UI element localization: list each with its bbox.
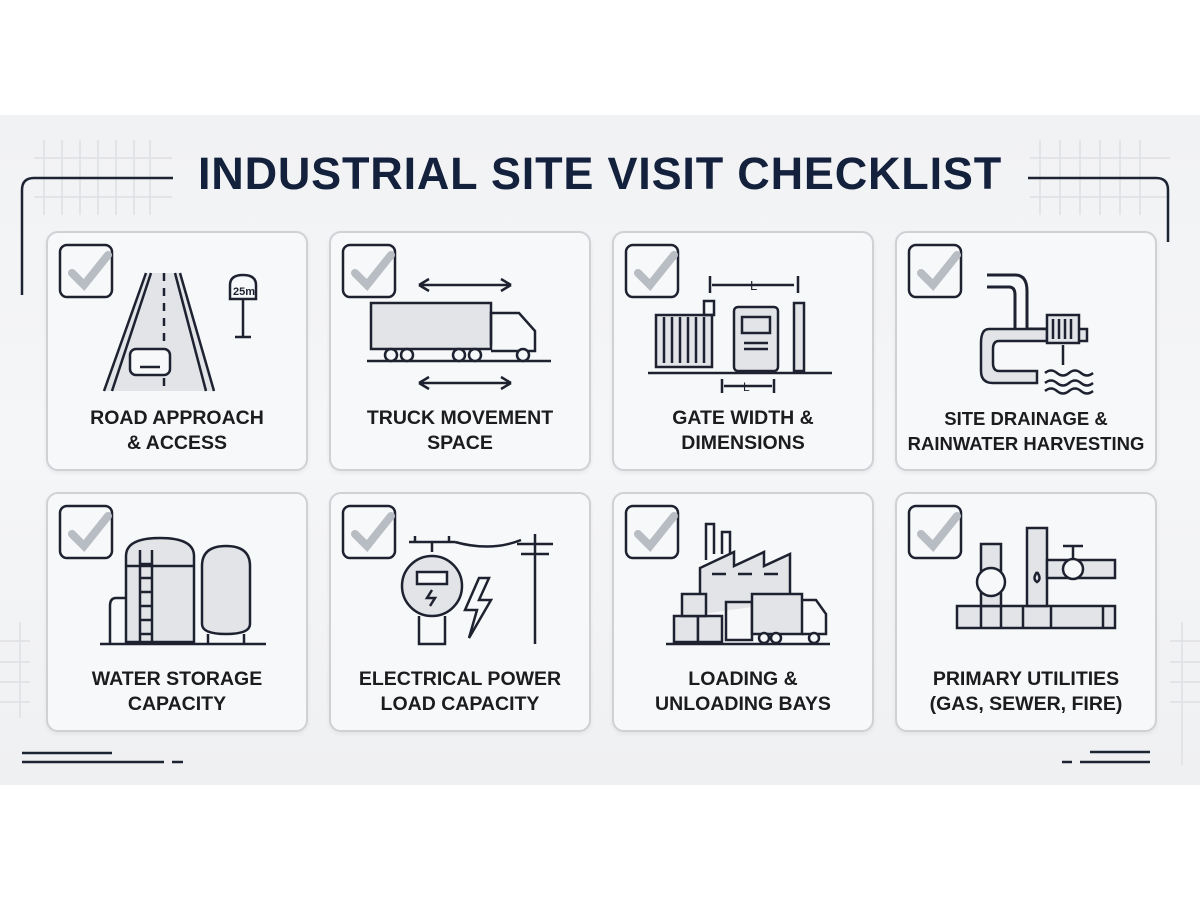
card: primary utilities: PRIMARY UTILITIES: [933, 668, 1119, 690]
icon: checkbox: [60, 506, 112, 558]
title: INDUSTRIAL SITE VISIT CHECKLIST: [198, 148, 1002, 199]
icon: pipes and water: [981, 275, 1093, 394]
card: road approach: [46, 231, 308, 471]
icon: road: 25m: [233, 286, 255, 298]
card: truck movement: TRUCK MOVEMENT: [367, 407, 553, 429]
icon: checkbox: [343, 506, 395, 558]
icon: checkbox: [626, 506, 678, 558]
card: drainage: SITE DRAINAGE &: [944, 408, 1108, 429]
card: water storage: [46, 492, 308, 732]
icon: checkbox: [343, 245, 395, 297]
card: gate width: DIMENSIONS: [681, 432, 805, 454]
card: primary utilities: (GAS, SEWER, FIRE): [930, 693, 1122, 715]
icon: water tanks: [100, 538, 266, 644]
card: drainage: [895, 231, 1157, 471]
icon: checkbox: [60, 245, 112, 297]
card: gate width: [612, 231, 874, 471]
icon: gate and truck: [648, 276, 832, 394]
card: road approach: & ACCESS: [127, 432, 227, 454]
card: water storage: CAPACITY: [128, 693, 226, 715]
icon: truck with arrows: [367, 279, 551, 389]
card: road approach: ROAD APPROACH: [90, 407, 264, 429]
card: water storage: WATER STORAGE: [92, 668, 262, 690]
card: gate width: GATE WIDTH &: [672, 407, 814, 429]
card: loading bays: [612, 492, 874, 732]
card: electrical: ELECTRICAL POWER: [359, 668, 561, 690]
icon: meter and pole: [402, 534, 553, 644]
card: loading bays: LOADING &: [688, 668, 798, 690]
icon: utility pipes: [957, 528, 1115, 628]
card: electrical: [329, 492, 591, 732]
card: truck movement: [329, 231, 591, 471]
icon: checkbox: [909, 245, 961, 297]
icon: gate and truck: L: [750, 278, 757, 293]
icon: factory with truck: [666, 524, 830, 644]
card: truck movement: SPACE: [427, 432, 493, 454]
icon: checkbox: [909, 506, 961, 558]
card: drainage: RAINWATER HARVESTING: [908, 433, 1144, 454]
icon: checkbox: [626, 245, 678, 297]
card: primary utilities: [895, 492, 1157, 732]
icon: road: [104, 273, 256, 391]
card: electrical: LOAD CAPACITY: [381, 693, 539, 715]
card: loading bays: UNLOADING BAYS: [655, 693, 831, 715]
icon: gate and truck: L: [743, 380, 750, 394]
